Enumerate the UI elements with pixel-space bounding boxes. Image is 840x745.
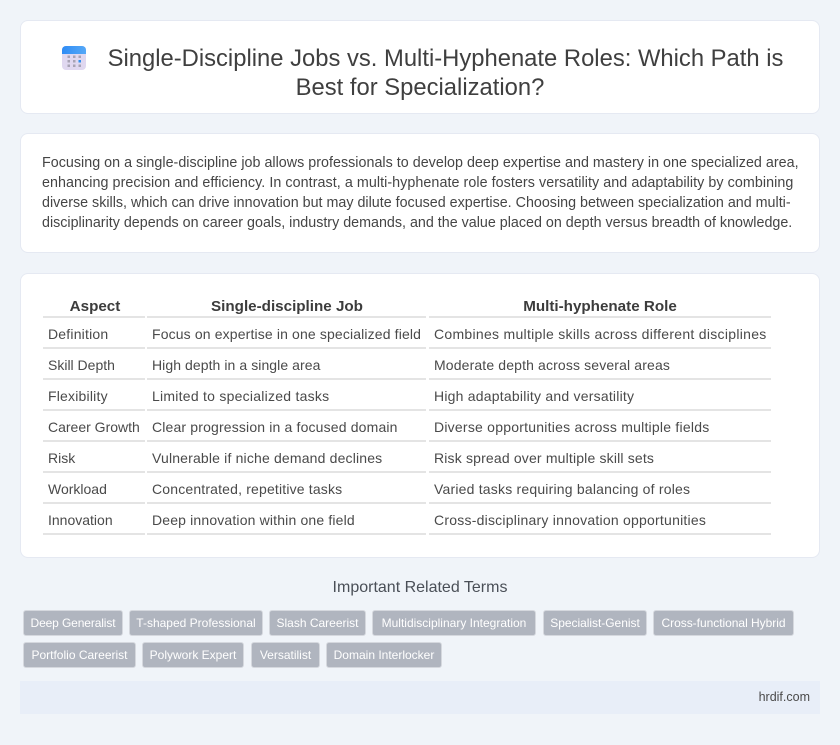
panel: summary: [20, 133, 820, 253]
text: Clear progression in a focused domain: [152, 419, 398, 435]
tag: Multidisciplinary Integration: [382, 616, 526, 630]
text: Diverse opportunities across multiple fields: [434, 419, 709, 435]
text: Moderate depth across several areas: [434, 357, 670, 373]
text block: summary paragraph: [42, 155, 799, 231]
tag: [23, 610, 123, 636]
row: flexibility: [48, 388, 634, 404]
tag: Slash Careerist: [276, 616, 359, 630]
tag: T-shaped Professional: [136, 616, 256, 630]
text: Risk: [48, 450, 75, 466]
text: Vulnerable if niche demand declines: [152, 450, 382, 466]
row: career growth: [48, 419, 709, 435]
tag: Cross-functional Hybrid: [661, 616, 786, 630]
text block: summary paragraph: Focusing on a single-discipline job allows professionals to develop deep expertise and mastery in one specialized area,: [42, 155, 799, 171]
text: Varied tasks requiring balancing of roles: [434, 481, 690, 497]
tags: related terms: [23, 610, 794, 668]
row: skill depth: [48, 357, 670, 373]
text: Definition: [48, 326, 108, 342]
text: Skill Depth: [48, 357, 115, 373]
row: workload: [48, 481, 690, 497]
footer bar: [20, 681, 820, 714]
tag: Deep Generalist: [31, 616, 115, 630]
tag: Domain Interlocker: [334, 648, 434, 662]
text: Risk spread over multiple skill sets: [434, 450, 654, 466]
table header: single-discipline job: Single-discipline Job: [211, 298, 363, 315]
text: High adaptability and versatility: [434, 388, 634, 404]
tag: [326, 642, 442, 668]
tag: [142, 642, 244, 668]
text block: summary paragraph: enhancing precision and efficiency. In contrast, a multi-hyphenate role fosters versatility and adaptability by combining: [42, 175, 793, 191]
tag: [543, 610, 647, 636]
text: Innovation: [48, 512, 113, 528]
panel: title card: [20, 20, 820, 114]
text: Limited to specialized tasks: [152, 388, 329, 404]
heading: important related terms: Important Related Terms: [333, 579, 507, 596]
tag: [653, 610, 794, 636]
text: Concentrated, repetitive tasks: [152, 481, 342, 497]
text: Deep innovation within one field: [152, 512, 355, 528]
footer: site name: hrdif.com: [759, 690, 810, 704]
text: High depth in a single area: [152, 357, 320, 373]
tag: [129, 610, 263, 636]
tag: [372, 610, 536, 636]
panel: comparison table: [20, 273, 820, 558]
text: Combines multiple skills across different disciplines: [434, 326, 767, 342]
row: definition: [48, 326, 767, 342]
text block: summary paragraph: disciplinarity depends on career goals, industry demands, and the value placed on depth versus breadth of knowledge.: [42, 215, 792, 231]
tag: Specialist-Genist: [550, 616, 640, 630]
tag: Versatilist: [260, 648, 311, 662]
table header: multi-hyphenate role: Multi-hyphenate Role: [523, 298, 677, 315]
text: Cross-disciplinary innovation opportunities: [434, 512, 706, 528]
tag: [251, 642, 320, 668]
row: risk: [48, 450, 654, 466]
heading: title: Single-Discipline Jobs vs. Multi-Hyphenate Roles: Which Path is: [108, 45, 783, 72]
tag: [269, 610, 366, 636]
row: innovation: [48, 512, 706, 528]
text block: summary paragraph: diverse skills, which can drive innovation but may dilute focused expertise. Choosing between specialization and multi-: [42, 195, 791, 211]
text: Workload: [48, 481, 107, 497]
text: Focus on expertise in one specialized field: [152, 326, 421, 342]
text: Career Growth: [48, 419, 140, 435]
heading: title: [108, 45, 783, 101]
tag: Polywork Expert: [150, 648, 236, 662]
icon: calendar: [62, 46, 86, 70]
text: Flexibility: [48, 388, 108, 404]
tag: Portfolio Careerist: [31, 648, 128, 662]
heading: title: Best for Specialization?: [296, 74, 544, 101]
table header: aspect: Aspect: [70, 298, 120, 315]
tag: [23, 642, 136, 668]
